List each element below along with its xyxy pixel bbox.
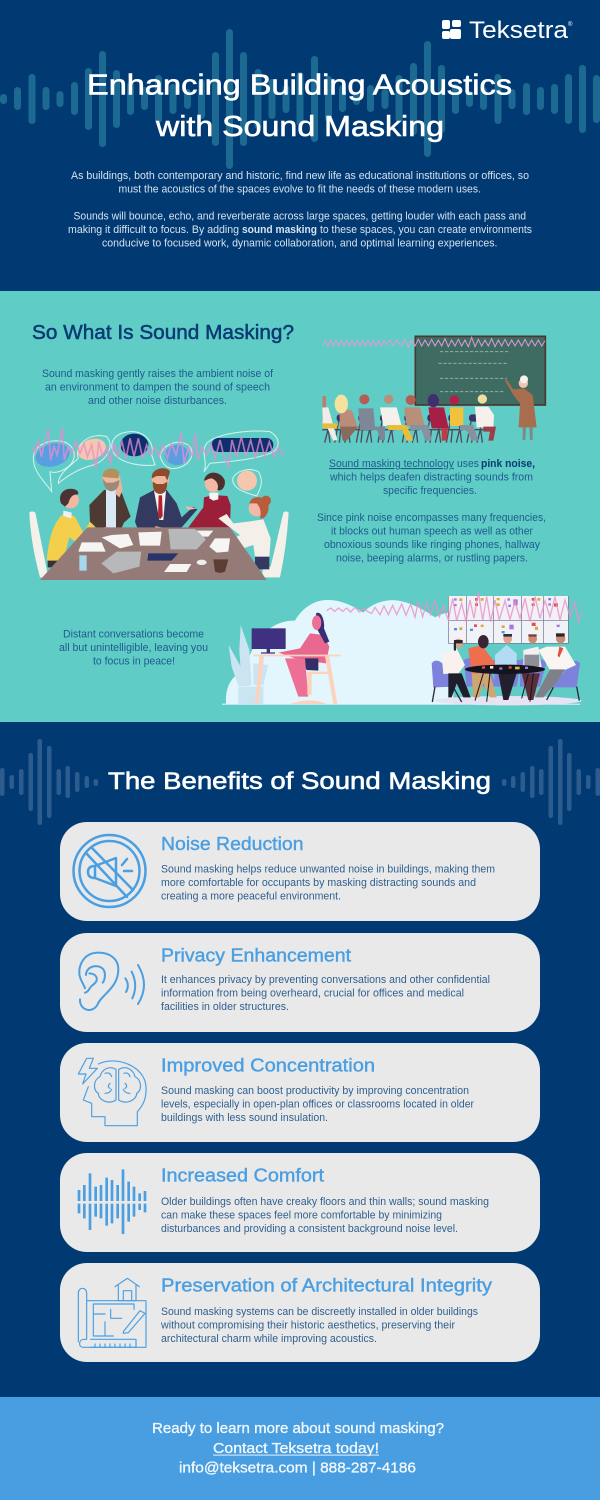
card: noise reduction: Noise Reduction bbox=[161, 834, 304, 854]
text: distant conversations: to focus in peace! bbox=[93, 656, 175, 668]
body text bbox=[161, 974, 490, 1013]
icon: muted speaker bbox=[74, 835, 146, 907]
body text: disturbances and providing a consistent background noise level. bbox=[161, 1223, 458, 1235]
intro text: Sounds will bounce, echo, and reverberate across large spaces, getting louder with each pass and bbox=[74, 210, 526, 222]
text: definition: and other noise disturbances. bbox=[88, 395, 227, 407]
teacher bbox=[505, 375, 537, 440]
body text: levels, especially in open-plan offices or classrooms located in older bbox=[161, 1098, 474, 1110]
intro text bbox=[68, 170, 532, 250]
panel: footer call to action bbox=[0, 1397, 600, 1500]
body text: can make these spaces feel more comfortable by minimizing bbox=[161, 1210, 442, 1222]
intro text: must the acoustics of the spaces evolve to fit the needs of these modern uses. bbox=[118, 184, 481, 196]
person: yellow sweater bbox=[47, 489, 97, 567]
students bbox=[313, 394, 496, 443]
card: improved concentration bbox=[60, 1043, 540, 1142]
text: pink noise: which helps deafen distracting sounds from bbox=[329, 472, 533, 484]
text: definition: an environment to dampen the sound of speech bbox=[45, 382, 270, 394]
person: brown jacket man bbox=[89, 468, 131, 537]
logo bbox=[442, 17, 573, 44]
person: white blouse woman bbox=[218, 496, 271, 569]
body text: Sound masking helps reduce unwanted noise in buildings, making them bbox=[161, 864, 495, 876]
icon: ear bbox=[79, 953, 144, 1010]
intro text: to these spaces, you can create environments bbox=[320, 224, 532, 236]
card: increased comfort: Increased Comfort bbox=[161, 1166, 324, 1186]
logo: Teksetra bbox=[469, 17, 569, 44]
text: pink noise: specific frequencies. bbox=[383, 485, 477, 497]
text: pink noise: Since pink noise encompasses many frequencies, bbox=[317, 512, 546, 524]
intro text: As buildings, both contemporary and historic, find new life as educational institutions or offices, so bbox=[71, 170, 529, 182]
body text: without compromising their historic aesthetics, preserving their bbox=[160, 1320, 455, 1332]
text: pink noise: obnoxious sounds like ringing phones, hallway bbox=[324, 539, 540, 551]
conference table bbox=[40, 527, 267, 580]
panel: footer call to action: info@teksetra.com | 888-287-4186 bbox=[179, 1460, 416, 1476]
card: increased comfort bbox=[60, 1153, 540, 1252]
ground line bbox=[222, 704, 580, 705]
icon: blueprint bbox=[78, 1278, 146, 1347]
text: pink noise: uses bbox=[457, 458, 479, 470]
card: preservation bbox=[60, 1263, 540, 1362]
panel: what is sound masking bbox=[0, 291, 600, 722]
body text: Sound masking systems can be discreetly installed in older buildings bbox=[161, 1306, 478, 1318]
body text bbox=[161, 1196, 489, 1235]
person: red sweater woman bbox=[188, 473, 231, 532]
text: definition: Sound masking gently raises the ambient noise of bbox=[42, 368, 274, 380]
body text: information from being overheard, crucial for offices and medical bbox=[161, 988, 464, 1000]
card: privacy enhancement: Privacy Enhancement bbox=[161, 946, 351, 966]
text: pink noise: it blocks out human speech as well as other bbox=[331, 526, 533, 538]
card: noise reduction bbox=[60, 822, 540, 921]
sticky-note board bbox=[448, 596, 568, 643]
logo: ® bbox=[568, 21, 573, 28]
body text: buildings with less sound insulation. bbox=[161, 1112, 328, 1124]
speech bubbles bbox=[33, 431, 278, 496]
text: pink noise: pink noise, bbox=[481, 458, 535, 470]
body text bbox=[161, 864, 495, 902]
body text bbox=[161, 1085, 474, 1124]
body text: facilities in older structures. bbox=[161, 1001, 289, 1013]
text: pink noise: noise, beeping alarms, or rustling papers. bbox=[336, 552, 528, 564]
intro text: making it difficult to focus. By adding bbox=[68, 224, 239, 236]
person: navy suit man bbox=[135, 468, 197, 532]
icon: sound wave bbox=[77, 1169, 147, 1234]
illustration: meeting bbox=[29, 427, 289, 580]
team at table bbox=[432, 633, 582, 705]
chairs bbox=[29, 511, 289, 577]
card: preservation: Preservation of Architectural Integrity bbox=[161, 1276, 492, 1296]
sound wave left bbox=[0, 739, 98, 825]
body text: Older buildings often have creaky floors and thin walls; sound masking bbox=[161, 1196, 489, 1208]
panel: benefits bbox=[0, 722, 600, 1397]
plant bbox=[229, 625, 268, 704]
text: pink noise: Sound masking technology bbox=[329, 458, 454, 470]
cloud background bbox=[226, 600, 453, 704]
contact link: Contact Teksetra today! bbox=[213, 1441, 379, 1457]
intro text: sound masking bbox=[242, 224, 317, 236]
pink wave bbox=[327, 592, 582, 622]
panel: header bbox=[0, 0, 600, 291]
body text: creating a more peaceful environment. bbox=[161, 890, 341, 902]
woman at desk bbox=[252, 613, 341, 704]
sound wave right bbox=[502, 739, 600, 825]
title: Enhancing Building Acoustics bbox=[87, 70, 512, 102]
body text: It enhances privacy by preventing conversations and other confidential bbox=[161, 974, 490, 986]
card: improved concentration: Improved Concentration bbox=[161, 1056, 375, 1076]
title: with Sound Masking bbox=[155, 111, 444, 143]
title bbox=[87, 70, 512, 143]
text: pink noise bbox=[317, 458, 546, 564]
body text: architectural charm while improving acoustics. bbox=[161, 1333, 377, 1345]
heading: The Benefits of Sound Masking bbox=[108, 768, 491, 795]
card: privacy enhancement bbox=[60, 933, 540, 1032]
illustration: classroom bbox=[313, 336, 545, 443]
panel: footer call to action: Ready to learn more about sound masking? bbox=[152, 1421, 444, 1437]
blackboard bbox=[415, 336, 545, 405]
body text: Sound masking can boost productivity by improving concentration bbox=[161, 1085, 469, 1097]
intro text: conducive to focused work, dynamic collaboration, and optimal learning experiences. bbox=[102, 238, 498, 250]
text: distant conversations: Distant conversations become bbox=[63, 628, 204, 640]
icon: head with brain bbox=[78, 1058, 146, 1126]
heading: So What Is Sound Masking? bbox=[32, 321, 294, 344]
pink noise wave bbox=[32, 427, 283, 468]
illustration: office bbox=[222, 592, 582, 705]
pink wave bbox=[323, 337, 545, 347]
body text bbox=[160, 1306, 478, 1345]
text: distant conversations bbox=[59, 628, 208, 668]
text: definition bbox=[42, 368, 274, 407]
body text: more comfortable for occupants by masking distracting sounds and bbox=[161, 877, 476, 889]
text: distant conversations: all but unintelligible, leaving you bbox=[59, 642, 208, 654]
sound wave background bbox=[0, 29, 600, 169]
